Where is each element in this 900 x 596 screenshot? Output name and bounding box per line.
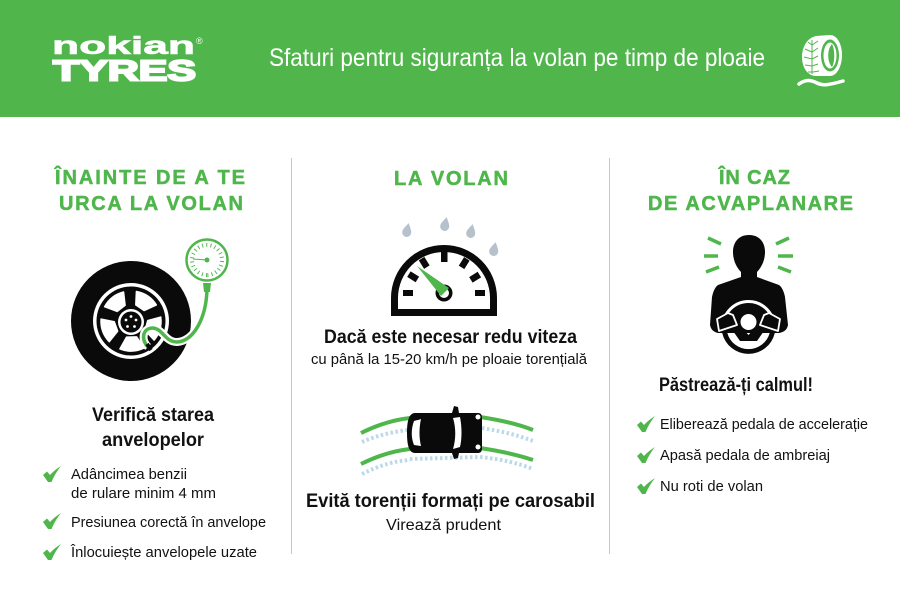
heading: ÎN CAZ	[718, 165, 790, 189]
road advice text: Virează prudent	[386, 517, 502, 534]
checklist: Adâncimea benzii	[71, 466, 187, 483]
icon: wheel and pressure gauge	[71, 240, 228, 381]
checklist: Nu roti de volan	[660, 478, 763, 495]
dividers	[291, 158, 610, 554]
checklist: Înlocuiește anvelopele uzate	[70, 544, 257, 561]
heading	[54, 165, 245, 215]
icon: driver at steering wheel	[704, 235, 793, 354]
panel: aquaplaning	[637, 165, 868, 495]
checklist	[43, 466, 266, 561]
panel: before driving	[43, 165, 266, 561]
checklist: Apasă pedala de ambreiaj	[660, 447, 830, 464]
subheading	[92, 405, 214, 451]
road advice text: Evită torenții formați pe carosabil	[306, 491, 595, 512]
checklist	[637, 416, 868, 495]
speed advice text	[311, 327, 588, 368]
checklist: Presiunea corectă în anvelope	[71, 514, 266, 531]
speed advice text: Dacă este necesar redu viteza	[324, 327, 577, 348]
subheading: Păstrează-ți calmul!	[659, 375, 813, 396]
heading: URCA LA VOLAN	[59, 193, 243, 215]
heading	[648, 165, 853, 215]
header title: Sfaturi pentru siguranța la volan pe timp de ploaie	[269, 44, 765, 72]
subheading: anvelopelor	[102, 430, 205, 451]
heading: ÎNAINTE DE A TE	[54, 165, 245, 189]
heading: DE ACVAPLANARE	[648, 193, 853, 215]
logo: Nokian Tyres: TYRES	[53, 56, 196, 88]
logo: Nokian Tyres	[52, 32, 203, 88]
heading: LA VOLAN	[394, 168, 508, 190]
icon: car on wet road	[361, 406, 533, 474]
checklist: Eliberează pedala de accelerație	[660, 416, 868, 433]
logo: Nokian Tyres: nokian	[52, 32, 195, 60]
icon: tyre on water	[799, 35, 843, 85]
icon: speedometer with rain	[391, 216, 500, 316]
logo: Nokian Tyres: ®	[196, 36, 203, 46]
panel: at the wheel	[306, 168, 595, 534]
header band	[0, 0, 900, 117]
road advice text	[306, 491, 595, 534]
checklist: de rulare minim 4 mm	[71, 485, 216, 502]
speed advice text: cu până la 15-20 km/h pe ploaie torențială	[311, 351, 588, 368]
subheading: Verifică starea	[92, 405, 214, 426]
